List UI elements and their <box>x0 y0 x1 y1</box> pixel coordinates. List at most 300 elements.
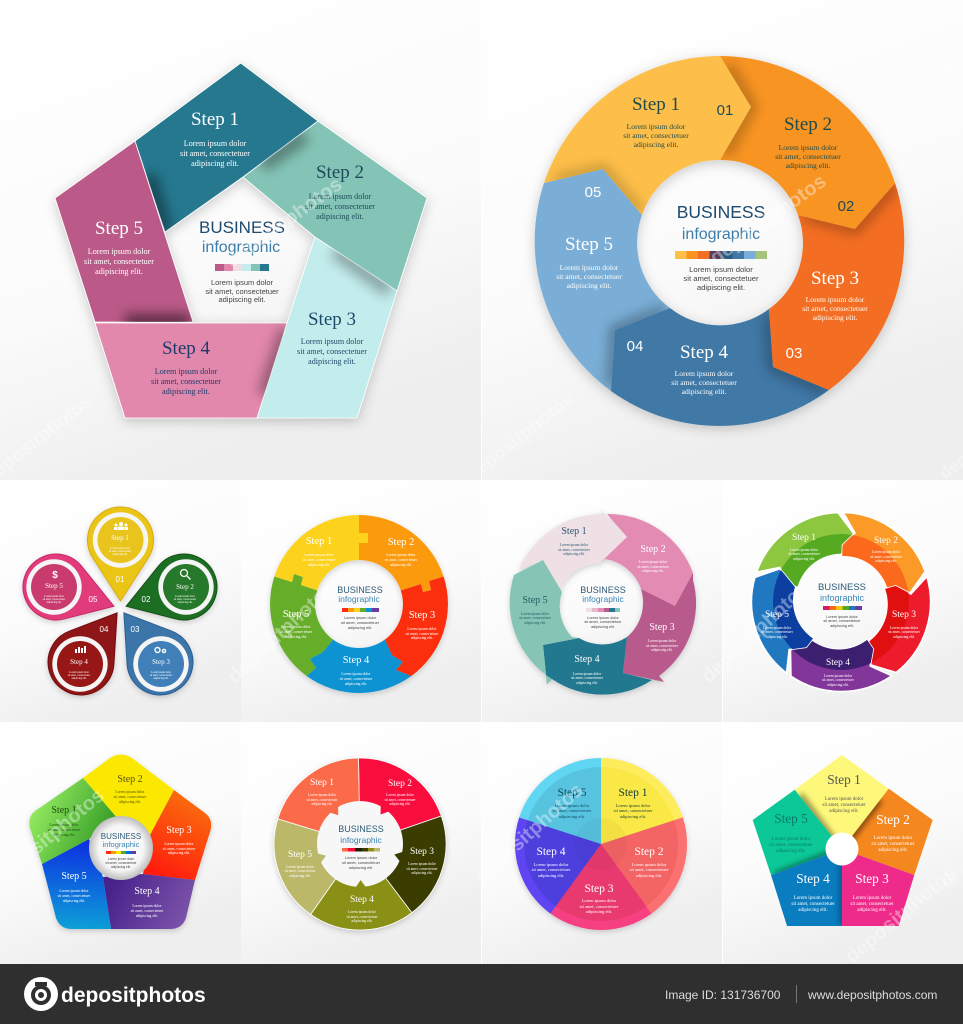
center title: adipiscing elit. <box>111 865 131 869</box>
step 1 text <box>48 805 81 837</box>
step 5 text <box>761 610 794 639</box>
step 2 text: sit amet, consectetuer <box>637 565 670 570</box>
step 5 text: Lorem ipsum dolor <box>59 889 89 893</box>
panel: large pentagon <box>55 63 427 418</box>
center title: BUSINESS <box>199 218 285 237</box>
center title <box>338 824 384 870</box>
step 3 text: sit amet, consectetuer <box>406 632 439 637</box>
ring wedges <box>274 758 446 930</box>
step 3 text: Lorem ipsum dolor <box>648 639 677 643</box>
step 3 text: Lorem ipsum dolor <box>582 898 617 903</box>
center title: Lorem ipsum dolor <box>344 615 377 620</box>
step 5 text: Step 5 <box>774 811 808 826</box>
step 3 text: sit amet, consectetuer <box>646 644 679 649</box>
center title: BUSINESS <box>580 585 626 595</box>
step 4 text <box>131 886 164 918</box>
step 2 text: adipiscing elit. <box>177 601 193 604</box>
step 5 text: Lorem ipsum dolor <box>555 803 590 808</box>
icon: people <box>114 522 128 530</box>
center title: infographic <box>820 593 865 603</box>
step 2 text <box>871 812 915 853</box>
step 1 text <box>623 94 689 149</box>
step 3 text: sit amet, consectetuer <box>163 847 196 852</box>
center title: infographic <box>682 226 760 243</box>
petal step 4 <box>35 593 144 708</box>
petal step 2 <box>116 545 226 638</box>
center title: adipiscing elit. <box>830 624 854 628</box>
step 1 text: Step 1 <box>561 526 587 537</box>
petal numbers: 02 <box>142 595 151 604</box>
step 2 text: Step 2 <box>176 583 194 591</box>
step 5 text: sit amet, consectetuer <box>769 843 813 848</box>
step 3 text: Step 3 <box>811 268 859 289</box>
center title: BUSINESS <box>677 202 765 222</box>
segment step 4 <box>790 639 893 692</box>
center title: adipiscing elit. <box>348 625 372 630</box>
step 1 text: Lorem ipsum dolor <box>790 548 819 552</box>
step 5 text: sit amet, consectetuer <box>284 869 316 874</box>
step 3 text: adipiscing elit. <box>586 909 612 914</box>
numbers: 02 <box>838 198 854 215</box>
step 1 text <box>558 526 591 556</box>
step 4 text: Lorem ipsum dolor <box>675 369 734 378</box>
step 5 text: Lorem ipsum dolor <box>763 626 792 630</box>
icon: gears <box>155 648 166 653</box>
segment step 1 <box>758 514 853 587</box>
center title: BUSINESS <box>818 582 866 593</box>
step 1 text: adipiscing elit. <box>634 140 678 149</box>
step 1 text <box>614 787 653 819</box>
center title: BUSINESS <box>338 824 384 834</box>
step 4 text: adipiscing elit. <box>162 387 210 396</box>
step 2 text: adipiscing elit. <box>316 212 364 221</box>
petal numbers: 03 <box>131 625 140 634</box>
center title: infographic <box>340 835 383 845</box>
step 4 text: adipiscing elit. <box>827 683 849 687</box>
center title: sit amet, consectetuer <box>205 287 279 296</box>
center hole <box>826 832 858 866</box>
image id: Image ID: 131736700 <box>665 988 781 1002</box>
step 3 text: Lorem ipsum dolor <box>301 337 364 346</box>
step 5 text: Lorem ipsum dolor <box>286 865 315 869</box>
center title: Lorem ipsum dolor <box>345 855 378 860</box>
step 1 text: adipiscing elit. <box>793 557 815 561</box>
step 5 text: Lorem ipsum dolor <box>521 612 550 616</box>
step 4 text: sit amet, consectetuer <box>131 909 164 914</box>
step 3 text <box>850 871 894 913</box>
step 5 text: sit amet, consectetuer <box>519 616 552 621</box>
step 5 text: Step 5 <box>95 218 143 239</box>
step 3 text: Lorem ipsum dolor <box>407 627 437 631</box>
step 4 text: sit amet, consectetuer <box>340 677 373 682</box>
step 2 text: Step 2 <box>388 537 414 548</box>
step 5 text: Lorem ipsum dolor <box>88 247 151 256</box>
center title: sit amet, consectetuer <box>584 620 622 624</box>
step 5 text: Lorem ipsum dolor <box>281 625 311 629</box>
numbers: 04 <box>627 338 643 355</box>
step 1 text: sit amet, consectetuer <box>48 828 81 833</box>
step 1 text: sit amet, consectetuer <box>303 558 336 563</box>
step 5 text: sit amet, consectetuer <box>43 598 65 601</box>
step 5 text <box>519 595 552 625</box>
step 5 text: Step 5 <box>565 234 613 255</box>
step 1 text: adipiscing elit. <box>112 553 128 556</box>
step 5 text: adipiscing elit. <box>559 814 585 819</box>
step 4 text: Step 4 <box>574 654 600 665</box>
step 4 text: sit amet, consectetuer <box>346 915 378 920</box>
step 1 text: sit amet, consectetuer <box>788 552 821 557</box>
step 4 text: adipiscing elit. <box>345 682 367 686</box>
petal step 5 <box>14 545 124 638</box>
step 3 text: Lorem ipsum dolor <box>164 842 194 846</box>
step 4 text: Lorem ipsum dolor <box>155 367 218 376</box>
step 3 text: Step 3 <box>649 622 675 633</box>
step 2 text: Step 2 <box>876 812 910 827</box>
step 5 text: adipiscing elit. <box>46 601 62 604</box>
pentagon segments <box>55 63 427 418</box>
step 1 text: Step 1 <box>111 534 129 542</box>
step 1 text: adipiscing elit. <box>620 814 646 819</box>
step 1 text: adipiscing elit. <box>53 833 75 837</box>
step 3 text: sit amet, consectetuer <box>888 630 921 635</box>
step 5 text: adipiscing elit. <box>285 635 307 639</box>
step 1 text: Step 1 <box>632 94 680 115</box>
step 3 text <box>646 622 679 652</box>
step 4 text: sit amet, consectetuer <box>68 674 90 677</box>
step 5 text <box>43 582 65 604</box>
step 2 text <box>637 544 670 573</box>
numbers: 03 <box>786 345 802 362</box>
center title <box>580 585 626 629</box>
footer bar <box>0 964 963 1024</box>
step 3 text: adipiscing elit. <box>857 908 887 913</box>
step 3 text: Step 3 <box>152 658 170 666</box>
step 3 text: sit amet, consectetuer <box>406 867 438 872</box>
step 4 text <box>151 338 221 396</box>
step 3 text <box>150 658 172 680</box>
panel: pastel arrow ring <box>510 509 696 695</box>
puzzle segments <box>270 515 448 693</box>
step 3 text <box>406 847 438 875</box>
numbers <box>585 102 854 362</box>
step 2 text: sit amet, consectetuer <box>385 558 418 563</box>
step 4 text: Lorem ipsum dolor <box>824 674 853 678</box>
center title <box>101 832 141 869</box>
step 2 text: adipiscing elit. <box>875 559 897 563</box>
step 1 text: sit amet, consectetuer <box>822 803 866 808</box>
step 2 text: sit amet, consectetuer <box>384 798 416 803</box>
step 3 text: adipiscing elit. <box>651 648 673 652</box>
watermark text: depositphotos <box>222 173 346 272</box>
step 1 text: sit amet, consectetuer <box>180 149 250 158</box>
panel: rounded gradient pentagon <box>29 754 211 929</box>
step 5 text: sit amet, consectetuer <box>84 257 154 266</box>
step 5 text: sit amet, consectetuer <box>556 272 622 281</box>
step 1 text: Lorem ipsum dolor <box>184 139 247 148</box>
step 1 text: Lorem ipsum dolor <box>825 797 864 802</box>
petal numbers: 04 <box>100 625 109 634</box>
fold shadows <box>555 65 895 390</box>
step 4 text: Step 4 <box>536 846 566 858</box>
step 2 text: sit amet, consectetuer <box>174 598 196 601</box>
step 1 text: Step 1 <box>306 536 332 547</box>
step 1 text: adipiscing elit. <box>308 563 330 567</box>
step 1 text: adipiscing elit. <box>191 159 239 168</box>
step 2 text <box>305 162 375 221</box>
step 4 text: adipiscing elit. <box>798 908 828 913</box>
step 1 text: Lorem ipsum dolor <box>616 803 651 808</box>
step 1 text: sit amet, consectetuer <box>109 550 131 553</box>
step 2 text <box>114 774 147 804</box>
center cog <box>317 801 403 888</box>
step 4 text: sit amet, consectetuer <box>571 676 604 681</box>
step 2 text: adipiscing elit. <box>390 563 412 567</box>
center title: infographic <box>338 594 381 604</box>
step 2 text: Lorem ipsum dolor <box>115 790 145 794</box>
center title: Lorem ipsum dolor <box>587 616 619 620</box>
step 5 text: Lorem ipsum dolor <box>560 263 619 272</box>
step 4 text <box>340 655 373 686</box>
step 5 text <box>280 609 313 639</box>
step 4 text: Step 4 <box>343 655 370 666</box>
step 5 text: Lorem ipsum dolor <box>772 837 811 842</box>
step 2 text: Lorem ipsum dolor <box>175 595 195 598</box>
center title: adipiscing elit. <box>697 283 745 292</box>
panel: olive and red ring <box>274 758 446 930</box>
step 4 text: Step 4 <box>826 658 850 668</box>
step 5 text <box>553 787 592 819</box>
watermark text: depositphotos <box>471 779 588 888</box>
step 2 text <box>384 779 416 806</box>
center title: adipiscing elit. <box>591 625 615 629</box>
step 3 text: Lorem ipsum dolor <box>151 671 171 674</box>
numbers: 05 <box>585 184 601 201</box>
step 4 text: sit amet, consectetuer <box>791 902 835 907</box>
center title: Lorem ipsum dolor <box>689 265 753 274</box>
step 1 text <box>180 109 250 168</box>
step 1 text: adipiscing elit. <box>311 802 333 806</box>
arrow segments <box>510 509 696 695</box>
segment step 2 <box>842 512 925 593</box>
logo wordmark: depositphotos <box>61 984 206 1007</box>
step 5 text: adipiscing elit. <box>289 874 311 878</box>
step 5 text: Step 5 <box>288 850 312 860</box>
step 2 text: adipiscing elit. <box>642 569 664 573</box>
step 2 text: adipiscing elit. <box>119 800 141 804</box>
center title: adipiscing elit. <box>349 865 373 870</box>
center title <box>199 218 285 304</box>
step 3 text: Step 3 <box>166 825 192 836</box>
step 3 text: Step 3 <box>584 883 614 895</box>
step 2 text: sit amet, consectetuer <box>871 842 915 847</box>
step 1 text: Lorem ipsum dolor <box>49 823 79 827</box>
step 5 text: sit amet, consectetuer <box>553 808 592 814</box>
step 4 text <box>671 342 737 396</box>
step 3 text: adipiscing elit. <box>308 357 356 366</box>
step 3 text: sit amet, consectetuer <box>580 904 619 910</box>
center title <box>818 582 866 628</box>
step 5 text: Step 5 <box>765 610 789 620</box>
step 2 text: sit amet, consectetuer <box>305 202 375 211</box>
ring segments <box>535 56 904 426</box>
step 1 text: Step 1 <box>792 533 816 543</box>
step 3 text: Step 3 <box>410 847 434 857</box>
step 2 text: Lorem ipsum dolor <box>874 836 913 841</box>
step 3 text <box>802 268 868 322</box>
center title: BUSINESS <box>337 585 383 595</box>
step 5 text: adipiscing elit. <box>766 635 788 639</box>
center sphere <box>89 816 153 880</box>
watermark text <box>34 177 906 926</box>
center title: infographic <box>582 594 625 604</box>
step 2 text: Step 2 <box>784 114 832 135</box>
center title: infographic <box>103 840 140 849</box>
step 1 text: Step 1 <box>827 772 861 787</box>
step 2 text <box>870 536 903 563</box>
step 5 text: Step 5 <box>522 595 548 606</box>
step 2 text: sit amet, consectetuer <box>114 795 147 800</box>
petal numbers: 05 <box>89 595 98 604</box>
panel: two-tone arrow ring <box>752 513 931 692</box>
step 1 text: Lorem ipsum dolor <box>627 122 686 131</box>
step 5 text: sit amet, consectetuer <box>58 894 91 899</box>
step 5 text: Lorem ipsum dolor <box>44 595 64 598</box>
step 5 text: Step 5 <box>61 871 87 882</box>
step 1 text <box>306 778 338 806</box>
step 4 text: Step 4 <box>162 338 211 359</box>
step 2 text: Step 2 <box>634 846 664 858</box>
step 5 text: Step 5 <box>283 609 309 620</box>
watermark text: depositphotos <box>706 170 830 269</box>
step 4 text <box>571 654 604 685</box>
step 5 text: Step 5 <box>45 582 63 590</box>
pie inner slices <box>524 767 678 921</box>
step 3 text: Step 3 <box>409 610 435 621</box>
step 4 text: sit amet, consectetuer <box>532 867 571 873</box>
step 3 text: Step 3 <box>855 871 889 886</box>
step 4 text: sit amet, consectetuer <box>151 377 221 386</box>
step 4 text <box>822 658 855 687</box>
center title: sit amet, consectetuer <box>341 620 380 625</box>
center title: Lorem ipsum dolor <box>826 615 858 619</box>
step 4 text: Step 4 <box>350 895 374 905</box>
step 1 text: Lorem ipsum dolor <box>308 793 337 797</box>
step 2 text: Lorem ipsum dolor <box>779 143 838 152</box>
step 3 text <box>163 825 196 855</box>
center title: BUSINESS <box>101 832 141 841</box>
step 2 text <box>174 583 196 604</box>
icon: bars <box>75 646 86 653</box>
petal numbers <box>89 575 151 634</box>
step 5 text: adipiscing elit. <box>95 267 143 276</box>
step 4 text: Lorem ipsum dolor <box>341 672 371 676</box>
watermark text: depositphotos <box>697 578 813 688</box>
step 3 text: adipiscing elit. <box>411 871 433 875</box>
step 5 text <box>556 234 622 290</box>
center title: sit amet, consectetuer <box>342 860 381 865</box>
step 4 text: Step 4 <box>134 886 160 897</box>
step 5 text: adipiscing elit. <box>776 849 806 854</box>
step 1 text: Lorem ipsum dolor <box>110 547 130 550</box>
step 4 text: Lorem ipsum dolor <box>69 671 89 674</box>
pentagon segments <box>753 755 933 926</box>
step 3 text <box>297 309 367 366</box>
step 4 text: Step 4 <box>680 342 729 363</box>
petal numbers: 01 <box>116 575 125 584</box>
center title: infographic <box>202 239 280 256</box>
step 4 text <box>532 846 571 878</box>
step 4 text: adipiscing elit. <box>576 681 598 685</box>
center title: sit amet, consectetuer <box>823 619 861 623</box>
logo icon <box>24 977 58 1011</box>
step 3 text: Step 3 <box>892 610 916 620</box>
step 1 text <box>303 536 336 567</box>
step 2 text: Lorem ipsum dolor <box>309 192 372 201</box>
step 2 text: Step 2 <box>640 544 666 555</box>
step 5 text <box>769 811 813 854</box>
step 1 text: sit amet, consectetuer <box>558 548 591 553</box>
step 5 text <box>58 871 91 903</box>
step 3 text: sit amet, consectetuer <box>802 304 868 313</box>
step 3 text: sit amet, consectetuer <box>297 347 367 356</box>
segment step 5 <box>752 569 813 674</box>
step 2 text: Lorem ipsum dolor <box>632 862 667 867</box>
step 2 text: Step 2 <box>117 774 143 785</box>
step 5 text: sit amet, consectetuer <box>761 630 794 635</box>
panel: pie chart <box>515 758 687 930</box>
step 2 text <box>775 114 841 170</box>
panel: flat pentagon <box>753 755 933 926</box>
step 3 text <box>888 610 921 639</box>
icon: dollar: $ <box>52 570 58 581</box>
step 3 text: sit amet, consectetuer <box>850 902 894 907</box>
step 4 text: Lorem ipsum dolor <box>132 904 162 908</box>
center title: adipiscing elit. <box>218 295 266 304</box>
step 1 text: Lorem ipsum dolor <box>560 543 589 547</box>
center title: sit amet, consectetuer <box>105 861 138 865</box>
website url: www.depositphotos.com <box>807 988 937 1002</box>
step 5 text <box>84 218 154 276</box>
step 3 text: Lorem ipsum dolor <box>890 626 919 630</box>
step 2 text: Step 2 <box>316 162 364 183</box>
step 2 text: adipiscing elit. <box>389 802 411 806</box>
step 5 text: adipiscing elit. <box>63 899 85 903</box>
watermark text: depositphotos <box>841 862 961 968</box>
pentagon segments <box>29 754 211 929</box>
panel: large arrow ring <box>535 56 904 426</box>
step 4 text <box>791 871 835 913</box>
step 2 text: sit amet, consectetuer <box>870 555 903 560</box>
step 3 text: adipiscing elit. <box>411 636 433 640</box>
step 1 text: Step 1 <box>310 778 334 788</box>
step 1 text: Lorem ipsum dolor <box>304 553 334 557</box>
watermark text: depositphotos <box>223 578 339 688</box>
step 4 text: adipiscing elit. <box>682 387 726 396</box>
step 1 text <box>109 534 131 556</box>
step 2 text: sit amet, consectetuer <box>775 152 841 161</box>
step 5 text <box>284 850 316 878</box>
step 1 text: sit amet, consectetuer <box>614 808 653 814</box>
step 1 text <box>822 772 866 814</box>
panel: teardrop petals <box>14 507 226 708</box>
step 4 text: adipiscing elit. <box>71 677 87 680</box>
step 4 text: Lorem ipsum dolor <box>534 862 569 867</box>
step 3 text: adipiscing elit. <box>168 851 190 855</box>
step 2 text <box>385 537 418 567</box>
step 1 text: Step 1 <box>191 109 239 130</box>
numbers: 01 <box>717 102 733 119</box>
step 5 text: adipiscing elit. <box>524 621 546 625</box>
